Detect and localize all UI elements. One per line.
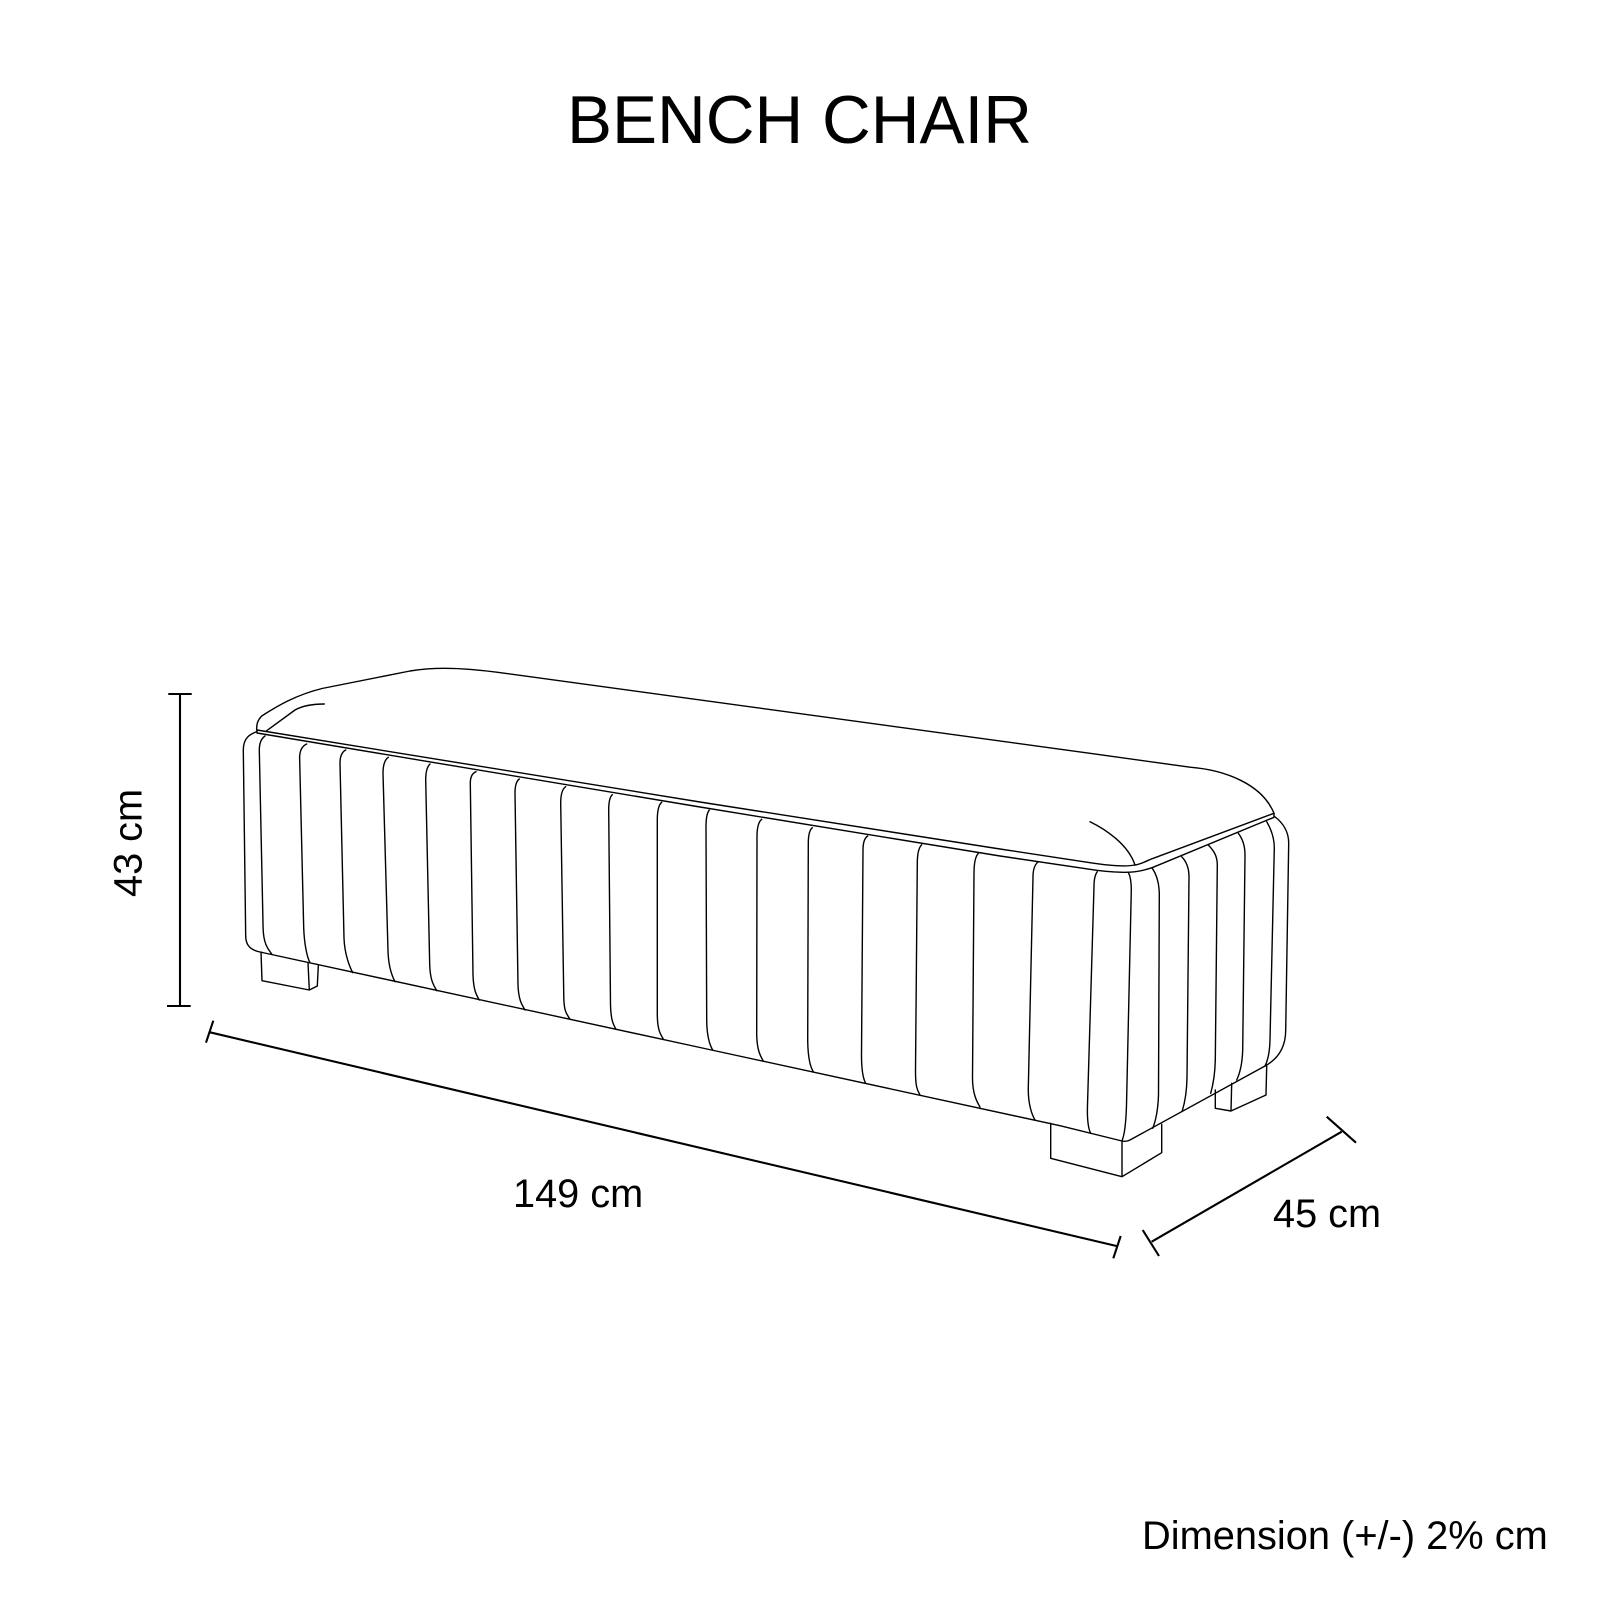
bench chair line drawing	[243, 668, 1289, 1177]
dimension: depth 45 cm: 45 cm	[1273, 1192, 1381, 1236]
footnote: Dimension (+/-) 2% cm	[1142, 1514, 1548, 1558]
icon: front right leg	[1051, 1123, 1162, 1177]
icon: left back leg	[261, 952, 318, 990]
dimension: length 149 cm	[206, 1021, 1121, 1258]
dimension: length 149 cm: 149 cm	[513, 1172, 643, 1216]
bench body outline	[243, 732, 1289, 1141]
dimension: height 43 cm: 43 cm	[106, 789, 150, 897]
title: BENCH CHAIR	[567, 83, 1032, 158]
dimension: height 43 cm	[106, 694, 192, 1006]
corner and side panel pleats	[1087, 822, 1274, 1140]
seat piping	[257, 730, 1274, 872]
icon: back right leg	[1215, 1066, 1267, 1111]
seat cushion outline	[257, 668, 1274, 813]
front panel pleats	[259, 736, 1038, 1120]
left tuft crease	[267, 704, 324, 731]
right tuft crease	[1090, 822, 1135, 865]
dimension: depth 45 cm	[1143, 1117, 1381, 1256]
